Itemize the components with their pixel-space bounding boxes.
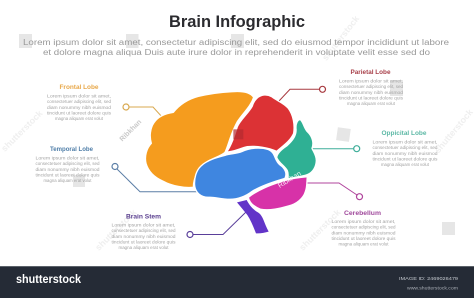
footer url: www.shutterstock.com xyxy=(407,286,458,290)
brain: parietal lobe xyxy=(227,95,294,152)
text block: occipital lobe: tincidunt ut laoreet dolore quis xyxy=(372,156,438,161)
text block: parietal lobe: tincidunt ut laoreet dolore quis xyxy=(339,95,403,100)
text block: brain stem: tincidunt ut laoreet dolore quis xyxy=(112,239,176,244)
text block: parietal lobe xyxy=(339,78,404,106)
subtitle text xyxy=(23,38,450,57)
text block: cerebellum xyxy=(332,219,396,246)
watermark layer: shutterstock xyxy=(433,106,474,155)
text block: cerebellum: magna aliquam erat volut xyxy=(338,242,389,246)
panel: cerebellum xyxy=(332,210,396,246)
text block: cerebellum: tincidunt ut laoreet dolore quis xyxy=(332,236,396,241)
text block: frontal lobe: magna aliquam erat volut xyxy=(55,116,104,121)
text block: brain stem: Lorem ipsum dolor sit amet, xyxy=(112,222,176,228)
panel: occipital lobe xyxy=(372,130,438,167)
text block: temporal lobe: consectetuer adipiscing elit, sed xyxy=(36,161,100,166)
connector: frontal lobe xyxy=(123,104,163,118)
text block: parietal lobe: Lorem ipsum dolor sit amet, xyxy=(339,78,403,84)
heading: temporal lobe: Temporal Lobe xyxy=(50,146,93,153)
watermark layer: shutterstock xyxy=(320,13,362,63)
watermark on brain xyxy=(233,129,243,139)
text block: parietal lobe: consectetuer adipiscing elit, sed xyxy=(339,84,404,89)
brain watermark label: Ribkhan xyxy=(277,170,303,190)
panel: frontal lobe xyxy=(47,84,112,121)
subtitle text: et dolore magna aliqua Duis aute irure dolor in reprehenderit in voluptate velit esse sed do xyxy=(43,48,431,57)
connector: temporal lobe xyxy=(112,164,198,192)
heading: occipital lobe: Oppicital Lobe xyxy=(382,130,427,137)
footer logo: shutterstock xyxy=(16,274,82,286)
connector: occipital lobe xyxy=(311,146,360,152)
text block: cerebellum: Lorem ipsum dolor sit amet, xyxy=(332,219,396,224)
text block: frontal lobe: tincidunt ut laoreet dolore quis xyxy=(47,110,111,115)
text block: temporal lobe: diam nonummy nibh euismod xyxy=(36,167,100,172)
connector: brain stem xyxy=(187,212,246,238)
connector: parietal lobe xyxy=(279,86,326,101)
text block: occipital lobe xyxy=(372,140,438,167)
heading: frontal lobe: Frontal Lobe xyxy=(60,84,99,91)
brain illustration xyxy=(145,91,316,233)
brain: cerebellum xyxy=(248,177,307,210)
heading: cerebellum: Cerebellum xyxy=(344,210,381,217)
text block: occipital lobe: magna aliquam erat volut xyxy=(381,162,430,167)
subtitle text: Lorem ipsum dolor sit amet, consectetur adipiscing elit, sed do eiusmod tempor incididunt ut labore xyxy=(23,38,450,47)
brain: frontal lobe xyxy=(145,91,254,188)
brain: stem xyxy=(237,200,269,233)
watermark layer: shutterstock xyxy=(93,207,139,253)
heading: brain stem: Brain Stem xyxy=(126,214,161,220)
watermark layer: shutterstock xyxy=(297,207,343,253)
text block: brain stem: consectetuer adipiscing elit, sed xyxy=(112,228,176,233)
text block: frontal lobe: diam nonummy nibh euismod xyxy=(47,105,112,110)
text block: parietal lobe: diam nonummy nibh euismod xyxy=(339,90,404,95)
text block: brain stem: diam nonummy nibh euismod xyxy=(112,234,176,239)
text block: cerebellum: consectetuer adipiscing elit, sed xyxy=(332,224,396,230)
panel: parietal lobe xyxy=(339,69,404,106)
brain: temporal lobe xyxy=(195,148,286,199)
text block: occipital lobe: diam nonummy nibh euismod xyxy=(372,151,438,156)
text block: occipital lobe: consectetuer adipiscing elit, sed xyxy=(372,145,438,150)
footer bar xyxy=(0,266,474,298)
connector: cerebellum xyxy=(306,183,362,200)
watermark layer: Ribkhan xyxy=(119,119,143,143)
text block: temporal lobe: tincidunt ut laoreet dolore quis xyxy=(36,172,100,177)
text block: parietal lobe: magna aliquam erat volut xyxy=(347,101,396,106)
brain: occipital lobe xyxy=(277,119,316,179)
footer image id: IMAGE ID: 2469026479 xyxy=(399,276,458,282)
text block: occipital lobe: Lorem ipsum dolor sit amet, xyxy=(372,140,438,144)
text block: temporal lobe: Lorem ipsum dolor sit amet, xyxy=(36,156,100,160)
text block: brain stem xyxy=(112,222,176,250)
text block: temporal lobe xyxy=(36,156,100,183)
title: Brain Infographic xyxy=(169,13,305,31)
panel: temporal lobe xyxy=(36,146,100,183)
text block: temporal lobe: magna aliquam erat volut xyxy=(44,178,92,183)
text block: brain stem: magna aliquam erat volut xyxy=(118,245,169,250)
panel: brain stem xyxy=(112,214,176,250)
text block: frontal lobe: consectetuer adipiscing elit, sed xyxy=(47,99,112,104)
heading: parietal lobe: Parietal Lobe xyxy=(350,69,391,76)
watermark layer: shutterstock xyxy=(0,108,45,154)
text block: frontal lobe xyxy=(47,94,112,121)
text block: cerebellum: diam nonummy nibh euismod xyxy=(332,230,396,235)
text block: frontal lobe: Lorem ipsum dolor sit amet, xyxy=(47,94,111,98)
